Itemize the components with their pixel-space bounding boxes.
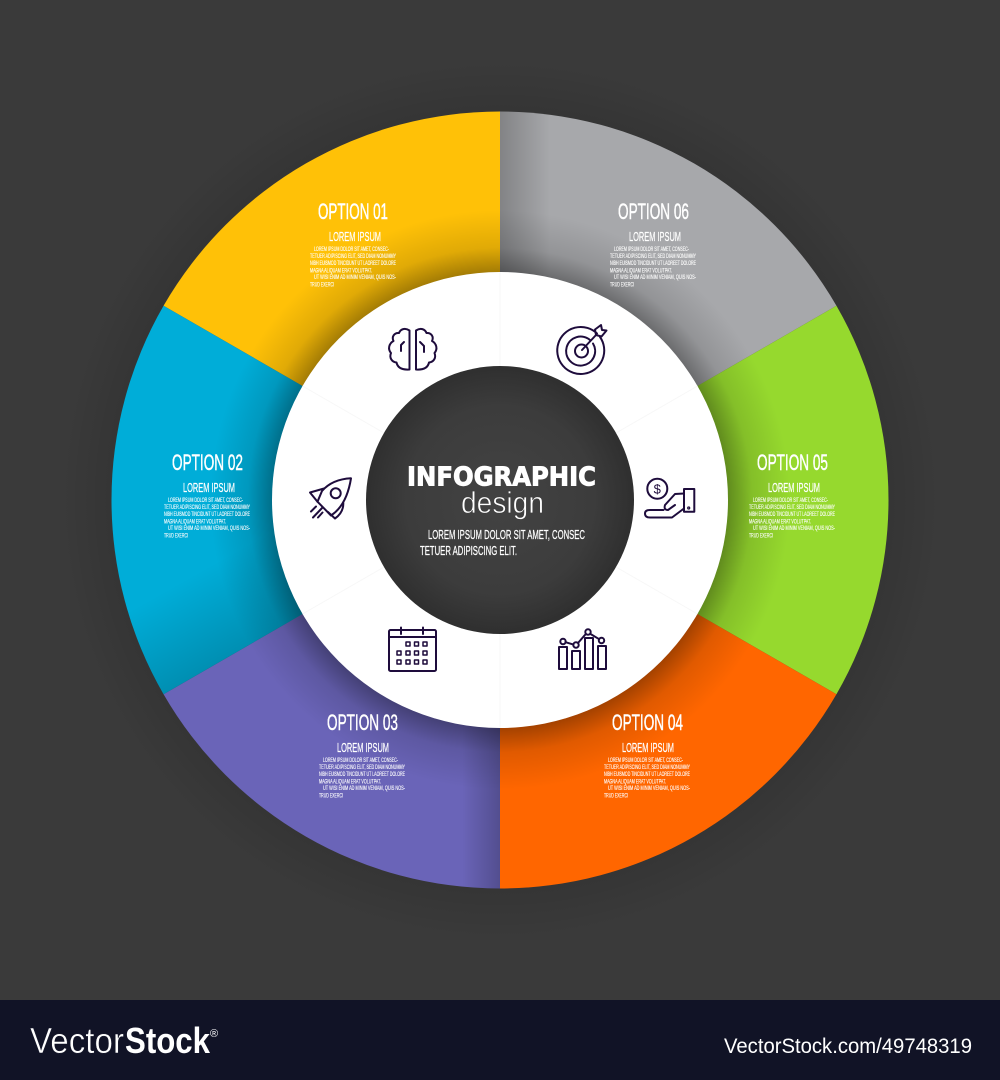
- text block: option 04: LOREM IPSUM DOLOR SIT AMET, CONSEC-: [608, 757, 683, 764]
- icon: rocket: [310, 478, 351, 518]
- text block: option 03: TRUD EXERCI: [319, 792, 343, 800]
- text block: option 06: [610, 246, 696, 288]
- text block: option 05: TETUER ADIPISCING ELIT, SED DIAM NONUMMY: [749, 504, 835, 511]
- subheading: option 01: LOREM IPSUM: [329, 229, 381, 244]
- heading: option 01: OPTION 01: [318, 199, 388, 224]
- heading: option 03: OPTION 03: [327, 710, 398, 735]
- text block: option 04: NIBH EUISMOD TINCIDUNT UT LAOREET DOLORE: [604, 771, 690, 778]
- text block: option 02: MAGNA ALIQUAM ERAT VOLUTPAT.: [164, 518, 226, 526]
- text block: option 03: LOREM IPSUM DOLOR SIT AMET, CONSEC-: [323, 757, 398, 764]
- text block: option 06: UT WISI ENIM AD MINIM VENIAM, QUIS NOS-: [614, 274, 696, 281]
- text block: option 01: UT WISI ENIM AD MINIM VENIAM, QUIS NOS-: [314, 274, 396, 281]
- text block: option 02: UT WISI ENIM AD MINIM VENIAM, QUIS NOS-: [168, 525, 250, 532]
- subheading: option 06: LOREM IPSUM: [629, 229, 681, 244]
- panel: option 01: [164, 112, 500, 500]
- footer logo: Vector: [30, 1020, 124, 1061]
- text block: option 04: [604, 757, 690, 800]
- center circle: [366, 366, 634, 634]
- heading: option 04: OPTION 04: [612, 710, 683, 735]
- text block: option 05: NIBH EUISMOD TINCIDUNT UT LAOREET DOLORE: [749, 511, 835, 518]
- text block: option 03: UT WISI ENIM AD MINIM VENIAM, QUIS NOS-: [323, 785, 405, 792]
- icon: hand with coin: [645, 479, 694, 518]
- text block: option 01: TRUD EXERCI: [310, 282, 334, 288]
- footer logo: ®: [210, 1028, 218, 1040]
- footer logo: [30, 1020, 218, 1061]
- text block: option 06: NIBH EUISMOD TINCIDUNT UT LAOREET DOLORE: [610, 260, 696, 267]
- footer url: VectorStock.com/49748319: [724, 1035, 972, 1058]
- text block: option 03: MAGNA ALIQUAM ERAT VOLUTPAT.: [319, 778, 381, 786]
- subheading: option 03: LOREM IPSUM: [337, 740, 389, 755]
- subheading: option 04: LOREM IPSUM: [622, 740, 674, 755]
- text block: option 03: NIBH EUISMOD TINCIDUNT UT LAOREET DOLORE: [319, 771, 405, 778]
- text block: option 01: LOREM IPSUM DOLOR SIT AMET, CONSEC-: [314, 246, 389, 253]
- text block: option 04: MAGNA ALIQUAM ERAT VOLUTPAT.: [604, 778, 666, 786]
- heading: option 02: OPTION 02: [172, 450, 243, 475]
- text block: option 01: MAGNA ALIQUAM ERAT VOLUTPAT.: [310, 268, 372, 274]
- text block: option 02: TRUD EXERCI: [164, 532, 188, 540]
- footer bar: [0, 1000, 1000, 1080]
- text block: option 02: [164, 497, 250, 540]
- text block: option 01: [310, 246, 396, 288]
- subheading: option 05: LOREM IPSUM: [768, 480, 820, 495]
- text block: option 06: MAGNA ALIQUAM ERAT VOLUTPAT.: [610, 268, 672, 274]
- text block: option 05: LOREM IPSUM DOLOR SIT AMET, CONSEC-: [753, 497, 828, 504]
- title: infographic: INFOGRAPHIC: [407, 462, 596, 492]
- panel: option 04: [500, 500, 836, 889]
- text block: option 06: LOREM IPSUM DOLOR SIT AMET, CONSEC-: [614, 246, 689, 253]
- icon: target: [557, 325, 606, 374]
- text block: option 03: [319, 757, 405, 800]
- text block: option 03: TETUER ADIPISCING ELIT, SED DIAM NONUMMY: [319, 764, 405, 771]
- text block: option 04: TETUER ADIPISCING ELIT, SED DIAM NONUMMY: [604, 764, 690, 771]
- text block: option 02: LOREM IPSUM DOLOR SIT AMET, CONSEC-: [168, 497, 243, 504]
- center text block: TETUER ADIPISCING ELIT.: [420, 543, 517, 558]
- text block: option 05: UT WISI ENIM AD MINIM VENIAM, QUIS NOS-: [753, 525, 835, 532]
- panel: option 05: [500, 306, 888, 694]
- text block: option 06: TETUER ADIPISCING ELIT, SED DIAM NONUMMY: [610, 253, 696, 260]
- text block: option 02: TETUER ADIPISCING ELIT, SED DIAM NONUMMY: [164, 504, 250, 511]
- center text block: LOREM IPSUM DOLOR SIT AMET, CONSEC: [428, 527, 585, 542]
- icon: calendar: [389, 628, 436, 671]
- panel: option 06: [500, 112, 836, 500]
- icon: brain: [389, 329, 436, 370]
- heading: option 06: OPTION 06: [618, 199, 689, 224]
- icon: hand with coin: $: [654, 482, 662, 496]
- text block: option 02: NIBH EUISMOD TINCIDUNT UT LAOREET DOLORE: [164, 511, 250, 518]
- subtitle: design: design: [461, 485, 544, 520]
- panel: option 03: [164, 500, 500, 888]
- panel: option 02: [112, 306, 500, 694]
- icon: bar chart: [559, 629, 606, 669]
- center text block: [420, 527, 585, 558]
- text block: option 05: [749, 497, 835, 540]
- text block: option 05: TRUD EXERCI: [749, 532, 773, 540]
- footer logo: Stock: [125, 1020, 211, 1061]
- subheading: option 02: LOREM IPSUM: [183, 480, 235, 495]
- text block: option 01: TETUER ADIPISCING ELIT, SED DIAM NONUMMY: [310, 253, 396, 260]
- heading: option 05: OPTION 05: [757, 450, 828, 475]
- text block: option 04: TRUD EXERCI: [604, 792, 628, 800]
- text block: option 01: NIBH EUISMOD TINCIDUNT UT LAOREET DOLORE: [310, 260, 396, 267]
- white ring: [272, 272, 728, 728]
- text block: option 04: UT WISI ENIM AD MINIM VENIAM, QUIS NOS-: [608, 785, 690, 792]
- text block: option 05: MAGNA ALIQUAM ERAT VOLUTPAT.: [749, 518, 811, 526]
- text block: option 06: TRUD EXERCI: [610, 282, 634, 288]
